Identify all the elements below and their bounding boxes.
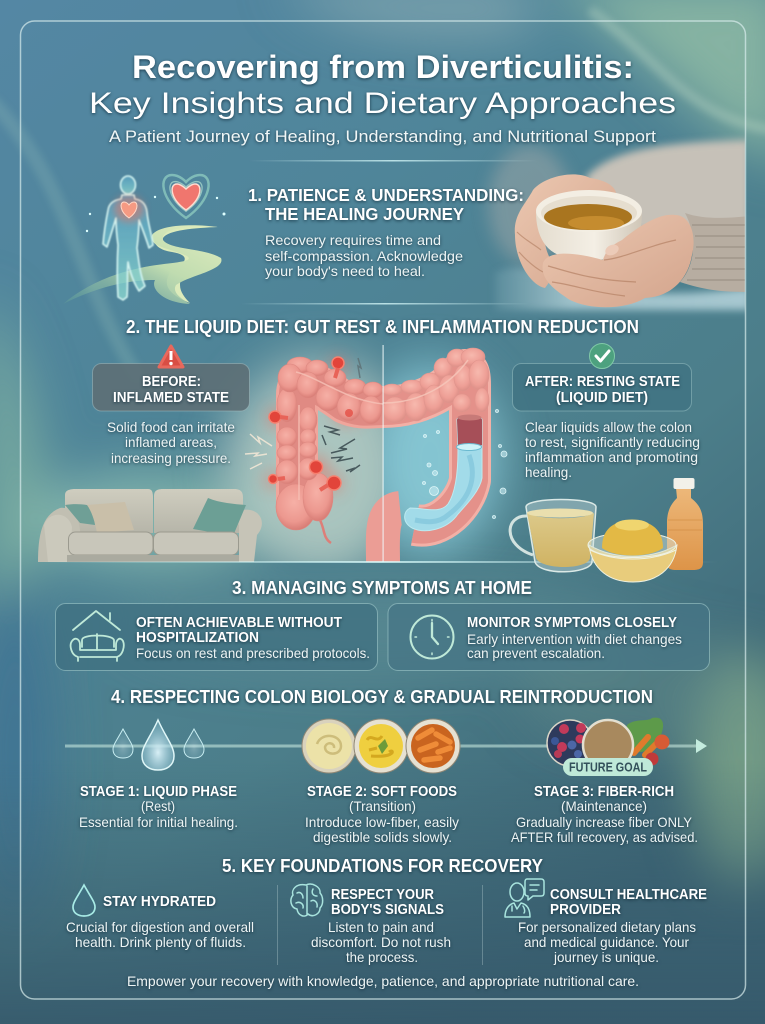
icon: brain [291,884,323,916]
illustration: sofa [38,489,262,562]
stage 3 text: AFTER full recovery, as advised. [511,829,698,845]
description: Listen to pain and [328,919,434,935]
sofa body [38,489,262,562]
mashed potato [302,719,356,773]
panel: after resting state [512,344,700,480]
stage 2 text: (Transition) [349,798,416,814]
tea cup [536,190,642,260]
stage 3 text: (Maintenance) [561,798,647,814]
split line [382,345,384,562]
label box: INFLAMED STATE [113,390,229,406]
stage 1 text [79,784,238,830]
icon: glowing walking figure on healing path [63,175,226,304]
label box [512,364,692,411]
glows [265,358,361,492]
heading: BODY'S SIGNALS [331,902,444,918]
foundation: consult healthcare provider [505,879,707,965]
grains [583,720,633,770]
description: Solid food can irritate [107,419,235,435]
icon: house and sofa [71,611,124,661]
description: Crucial for digestion and overall [66,919,254,935]
description [107,419,235,466]
description [525,419,700,480]
stage 1 text: STAGE 1: LIQUID PHASE [80,784,237,800]
bowl of gelatin [588,520,677,582]
icon: warning triangle [159,346,183,367]
icon: green check [590,344,614,368]
description: health. Drink plenty of fluids. [75,934,246,950]
right resting half [382,348,507,562]
label box [92,364,250,411]
pain bolts [322,426,360,472]
subtitle: A Patient Journey of Healing, Understanding, and Nutritional Support [109,127,656,146]
description: and medical guidance. Your [524,934,689,950]
text [136,615,370,661]
illustration: colon before and after [245,345,507,562]
colon backdrop [225,360,415,580]
section 1 text [265,232,463,279]
mug of broth [510,500,596,572]
panel: often achievable without hospitalization [56,604,378,670]
vegetables [627,718,670,766]
description: inflammation and promoting [525,449,698,465]
section 3 heading: 3. MANAGING SYMPTOMS AT HOME [232,578,532,598]
label box: BEFORE: [142,374,201,390]
heading: RESPECT YOUR [331,887,434,903]
title: Key Insights and Dietary Approaches [89,87,676,120]
foundation: respect your body's signals [291,884,451,965]
panel: before inflamed state [92,346,250,466]
sweater and blanket [488,140,750,310]
stage 1 text: Essential for initial healing. [79,814,238,830]
stage 2 text: Introduce low-fiber, easily [305,814,459,830]
heading: PROVIDER [550,902,621,918]
description: For personalized dietary plans [518,919,696,935]
icon: fiber-rich foods [547,718,670,770]
bottle [667,478,703,570]
text: HOSPITALIZATION [136,630,259,646]
text: Early intervention with diet changes [467,631,682,647]
diverticula [268,357,353,490]
section 1 text: self-compassion. Acknowledge [265,248,463,264]
berries [547,720,593,766]
chest heart [114,196,144,222]
icon: doctor with speech bubble [505,879,544,917]
back hand [515,174,616,288]
label box: AFTER: RESTING STATE [525,374,680,390]
stage 3 text: STAGE 3: FIBER-RICH [534,784,674,800]
timeline with arrow [65,739,707,753]
icon: soft food bowls [302,719,460,773]
footer message: Empower your recovery with knowledge, patience, and appropriate nutritional care. [127,973,639,989]
stage 2 text: STAGE 2: SOFT FOODS [307,784,457,800]
pillows [65,498,246,536]
text [467,615,682,661]
carrots [406,719,460,773]
heart with halo [86,175,226,232]
section 4 heading: 4. RESPECTING COLON BIOLOGY & GRADUAL REINTRODUCTION [111,687,653,707]
loop to rectum [383,508,400,562]
stage 2 text [305,784,459,845]
text: Focus on rest and prescribed protocols. [136,645,370,661]
inner lumen with fluid [405,414,482,531]
winding path [63,225,221,304]
title [89,49,676,120]
description: journey is unique. [553,949,659,965]
heading [550,887,707,918]
section 2 heading: 2. THE LIQUID DIET: GUT REST & INFLAMMATION REDUCTION [126,317,639,337]
title: Recovering from Diverticulitis: [132,49,634,85]
description [66,919,254,950]
section 1 heading [248,185,524,224]
description [518,919,696,965]
front hand [543,215,694,307]
stage 2 text: digestible solids slowly. [313,829,452,845]
scrambled egg [354,719,408,773]
illustration: clear liquids [510,478,703,582]
knit sleeve [680,213,750,292]
figure [103,176,153,300]
description: the process. [346,949,418,965]
future goal badge: FUTURE GOAL [569,760,647,774]
section 1 text: your body's need to heal. [265,263,425,279]
panel: photo of hands holding tea [488,140,750,310]
icon: water drops [113,720,204,770]
stage 3 text: Gradually increase fiber ONLY [516,814,693,830]
description: to rest, significantly reducing [525,434,700,450]
heading: CONSULT HEALTHCARE [550,887,707,903]
icon: drop [73,885,95,916]
text: OFTEN ACHIEVABLE WITHOUT [136,615,342,631]
left inflamed half [245,357,383,543]
lower bulge and tail [320,520,331,543]
heading [331,887,444,918]
description [311,919,451,965]
description: discomfort. Do not rush [311,934,451,950]
description: increasing pressure. [111,450,231,466]
description: inflamed areas, [125,434,217,450]
section 1 heading: 1. PATIENCE & UNDERSTANDING: [248,185,524,205]
text: MONITOR SYMPTOMS CLOSELY [467,615,677,631]
description: Clear liquids allow the colon [525,419,692,435]
foundation: stay hydrated [66,885,254,950]
section 1 text: Recovery requires time and [265,232,441,248]
stage 3 text [511,784,698,845]
description: healing. [525,464,572,480]
seat cushions [68,532,238,555]
panel: monitor symptoms closely [388,604,710,670]
icon: clock [410,616,454,658]
section 5 heading: 5. KEY FOUNDATIONS FOR RECOVERY [222,856,543,876]
label box: (LIQUID DIET) [556,390,648,406]
section 1 heading: THE HEALING JOURNEY [265,204,464,224]
text: can prevent escalation. [467,645,605,661]
heading: STAY HYDRATED [103,894,216,910]
stage 1 text: (Rest) [141,798,175,814]
